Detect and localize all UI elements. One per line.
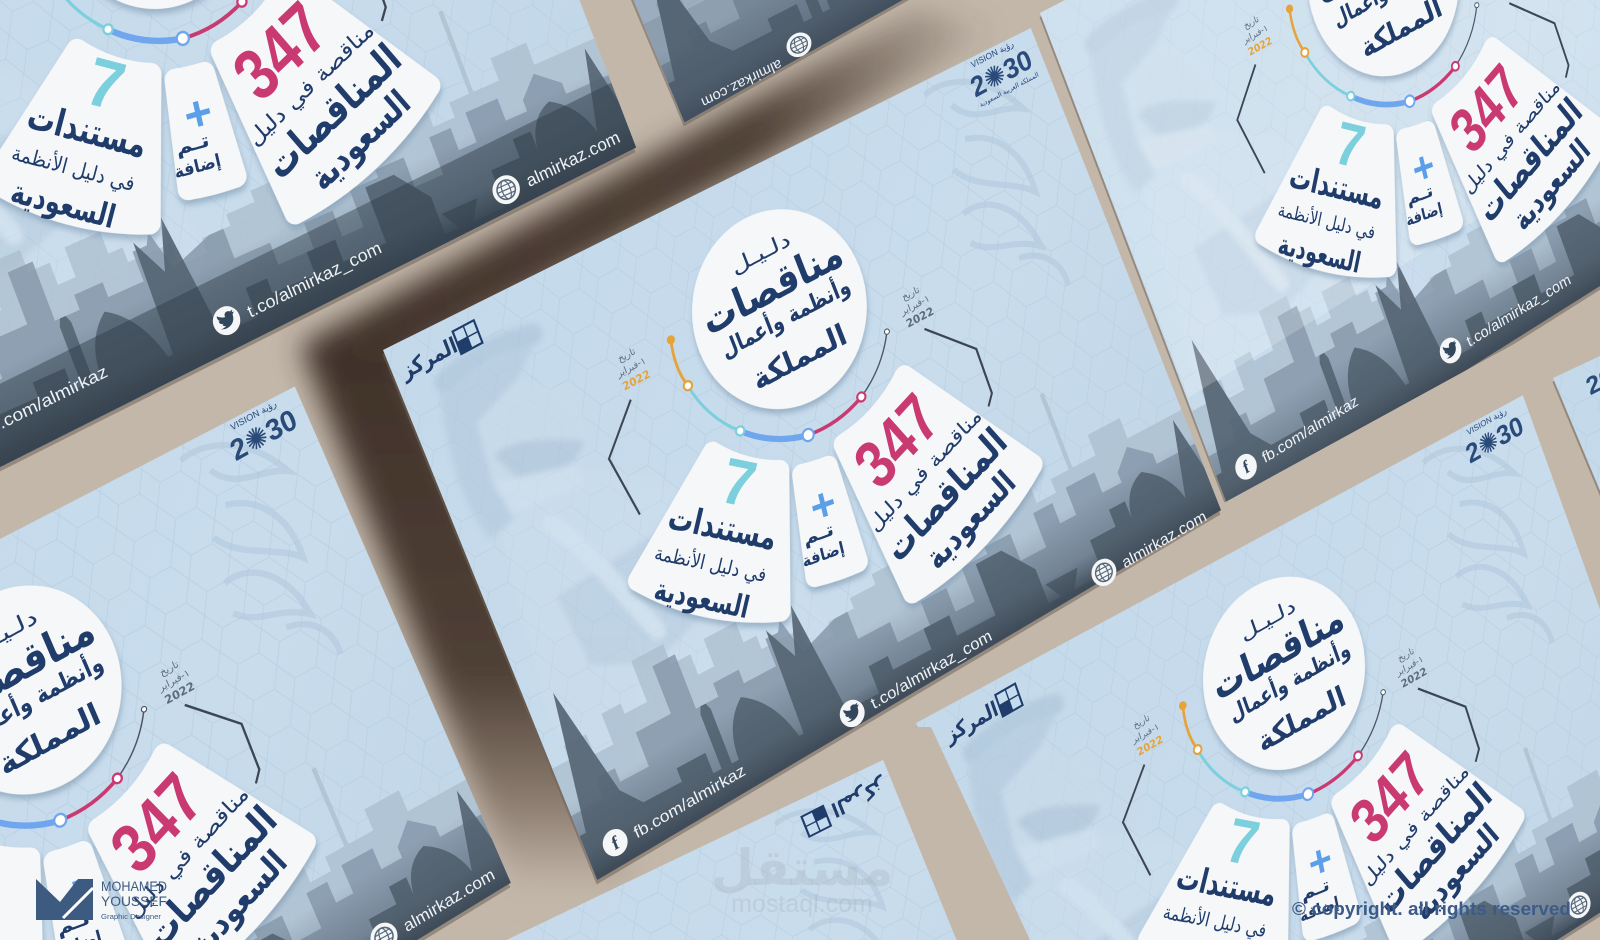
centre panel: 347 tenders [818, 354, 1037, 594]
centre panel: 7 documents: السعودية [651, 571, 753, 625]
bottom right vision 2030 mark: VISION رؤية [1466, 406, 1508, 437]
centre panel: added: + [805, 475, 841, 534]
top right footer: f [1240, 456, 1252, 478]
top left panel: 7 documents: مستندات [23, 94, 151, 167]
watermark: mostaql: مستقل [711, 839, 893, 897]
bottom right dates: تاريخ [1397, 646, 1416, 665]
centre title [687, 206, 874, 409]
centre left date: تاريخ [617, 346, 637, 365]
centre panel: 7 documents [643, 435, 795, 628]
bottom right title [1199, 573, 1371, 771]
bottom right title: مناقصات [1206, 594, 1350, 711]
centre vision 2030 mark: VISION رؤية [970, 38, 1015, 70]
top right footer: fb.com/almirkaz [1260, 393, 1361, 467]
bottom left right date [151, 656, 197, 708]
top right panel: added: + [1407, 140, 1439, 195]
top left panel: 7 documents: في دليل الأنظمة [9, 139, 138, 197]
bottom left panel: 347 tenders: 347 [96, 759, 218, 888]
bottom left vision 2030 mark: VISION رؤية [229, 399, 278, 432]
top right left date [1237, 11, 1274, 60]
centre panel: added: إضافة [800, 538, 846, 571]
centre left date [610, 343, 653, 394]
bottom right panel: 347 tenders: 347 [1338, 738, 1442, 857]
top right panel: added: تـم [1404, 180, 1435, 209]
tan gap below the top right card [1212, 297, 1600, 545]
bottom right panel: 347 tenders: السعودية [1408, 817, 1506, 928]
top right panel: 7 documents: في دليل الأنظمة [1276, 197, 1377, 245]
top right panel: added [1391, 140, 1446, 230]
bottom left panel: added [37, 863, 106, 940]
top left panel: 7 documents [0, 29, 168, 239]
top right footer: t.co/almirkaz_com [1464, 272, 1573, 351]
bottom centre inverted logo: المركز [828, 774, 889, 821]
card: top right [1038, 0, 1600, 532]
bottom left footer: almirkaz.com [400, 865, 498, 936]
bottom right dates [1126, 572, 1429, 829]
bottom right panel: added [1286, 833, 1343, 926]
centre footer: social links: t.co/almirkaz_com [869, 627, 995, 713]
bottom left panel: 347 tenders: مناقصة في دليل [123, 782, 254, 924]
top right panel: 7 documents [1268, 97, 1399, 283]
centre vision 2030 mark: المملكة العربية السعودية [979, 71, 1040, 109]
card: top centre [487, 0, 1338, 136]
centre right date: 2022 [904, 304, 936, 331]
centre title: مناقصات [695, 228, 849, 345]
bottom right footer globe [1564, 887, 1594, 923]
bottom right dates: تاريخ [1132, 713, 1152, 731]
top right left date: تاريخ [1243, 14, 1261, 32]
bottom right panel: 347 tenders [1316, 713, 1519, 940]
top left panel: 347 tenders: السعودية [303, 83, 418, 199]
centre panel: 347 tenders: السعودية [918, 463, 1023, 577]
centre logo: المركز [397, 333, 461, 385]
top left panel: added: + [179, 84, 218, 145]
bottom right logo [942, 682, 1024, 748]
bottom left right date: 2022 [163, 679, 197, 707]
centre panel: 347 tenders: مناقصة في دليل [863, 403, 987, 537]
centre panel: 7 documents: مستندات [664, 496, 781, 558]
bottom right title: وأنظمة وأعمال [1225, 632, 1354, 728]
top left footer: almirkaz.com [523, 127, 623, 191]
centre title: وأنظمة وأعمال [716, 269, 854, 364]
centre footer: social links: almirkaz.com [1120, 508, 1209, 572]
centre vision 2030 mark: 2✺30 [966, 43, 1036, 103]
top right panel: 347 tenders [1419, 27, 1600, 254]
bottom right panel: 7 documents: مستندات [1173, 858, 1281, 915]
top left panel: 7 documents: السعودية [7, 173, 119, 236]
top left footer: t.co/almirkaz_com [244, 237, 384, 322]
card: centre [381, 7, 1241, 895]
centre title: المملكة [748, 317, 851, 397]
top right panel: 347 tenders: 347 [1438, 51, 1535, 166]
bottom right dates: ١-فبراير [1130, 722, 1161, 747]
top left panel: added: إضافة [172, 151, 223, 183]
copyright line: © copyright. all rights reserved [1292, 899, 1571, 919]
bottom centre inverted logo [800, 774, 890, 838]
bottom right panel: added: إضافة [1298, 893, 1341, 926]
watermark: mostaql: mostaql.com [731, 890, 873, 918]
bottom right logo: المركز [942, 696, 1001, 748]
designer logo and name: Graphic Designer [101, 912, 162, 921]
designer logo and name: MOHAMED [101, 878, 167, 894]
card: bottom left [0, 364, 533, 940]
bottom right panel: added: تـم [1299, 874, 1331, 905]
top right panel: 347 tenders: مناقصة في دليل [1459, 75, 1564, 199]
bottom left panel: 347 tenders [72, 731, 310, 940]
centre right date [894, 281, 936, 331]
bottom right dates: ١-فبراير [1395, 654, 1425, 679]
centre logo [397, 319, 484, 385]
top right panel: added: إضافة [1405, 200, 1444, 230]
bottom left footer [366, 863, 501, 940]
top left panel: 347 tenders [194, 0, 434, 216]
top centre footer: inverted website: almirkaz.com [699, 55, 784, 111]
top left panel: added: تـم [173, 130, 212, 160]
top right panel: 7 documents: 7 [1330, 108, 1371, 181]
centre footer: social links: fb.com/almirkaz [632, 762, 748, 842]
drop shadow of the central card [300, 10, 1000, 890]
card: bottom centre [224, 741, 1075, 940]
top left footer [0, 126, 628, 442]
bottom right panel: 7 documents [1151, 797, 1295, 940]
bottom right panel: 7 documents: 7 [1220, 806, 1265, 879]
bottom left panel: added: + [58, 863, 98, 924]
bottom left right date: ١-فبراير [157, 668, 192, 695]
bottom right title: دلـيـل [1237, 593, 1299, 646]
top left title [52, 0, 257, 6]
top left panel: 347 tenders: مناقصة في دليل [243, 18, 379, 152]
bottom right dates: 2022 [1136, 733, 1165, 759]
bottom right panel: 347 tenders: المناقصات [1370, 775, 1499, 922]
bottom right dates: 2022 [1400, 665, 1429, 691]
top right footer [1231, 271, 1577, 484]
top left panel: 347 tenders: المناقصات [256, 34, 410, 189]
centre panel: 7 documents: في دليل الأنظمة [652, 541, 769, 587]
top right title [1303, 0, 1466, 76]
card: top left [0, 0, 636, 472]
centre panel: added: تـم [801, 519, 836, 550]
bottom left right date: تاريخ [158, 659, 181, 679]
top left panel: added [157, 84, 225, 183]
centre panel: added [785, 475, 848, 571]
centre left date: 2022 [621, 367, 652, 394]
top left panel: 7 documents: 7 [78, 43, 132, 126]
bottom right vision 2030 mark: 2✺30 [1462, 410, 1527, 470]
centre footer: social links: f [609, 832, 623, 855]
centre footer: social links [595, 505, 1215, 861]
top centre footer: inverted website [695, 28, 817, 111]
top right panel: 7 documents: مستندات [1286, 158, 1387, 218]
bottom left vision 2030 mark: 2✺30 [226, 403, 302, 468]
tan gap left of the bottom right card [870, 727, 1030, 940]
card: bottom right [914, 375, 1600, 940]
top right left date: 2022 [1247, 35, 1274, 59]
designer logo and name [36, 878, 167, 921]
centre title: دلـيـل [728, 226, 794, 280]
bottom right panel: 347 tenders: مناقصة في دليل [1357, 759, 1473, 891]
bottom right title: المملكة [1253, 679, 1350, 759]
bottom left title [0, 582, 130, 797]
centre right date: تاريخ [901, 284, 921, 303]
top right panel: 7 documents: السعودية [1275, 228, 1364, 281]
bottom right panel: added: + [1304, 833, 1337, 890]
centre panel: 347 tenders: 347 [841, 380, 953, 503]
centre left date: ١-فبراير [615, 355, 647, 381]
top right left date: ١-فبراير [1241, 23, 1270, 47]
bottom left panel: added: تـم [54, 908, 92, 940]
designer logo and name: YOUSSEF [101, 893, 167, 909]
centre panel: 347 tenders: المناقصات [876, 419, 1015, 570]
centre right date: ١-فبراير [899, 293, 931, 318]
centre panel: 7 documents: 7 [714, 445, 763, 522]
